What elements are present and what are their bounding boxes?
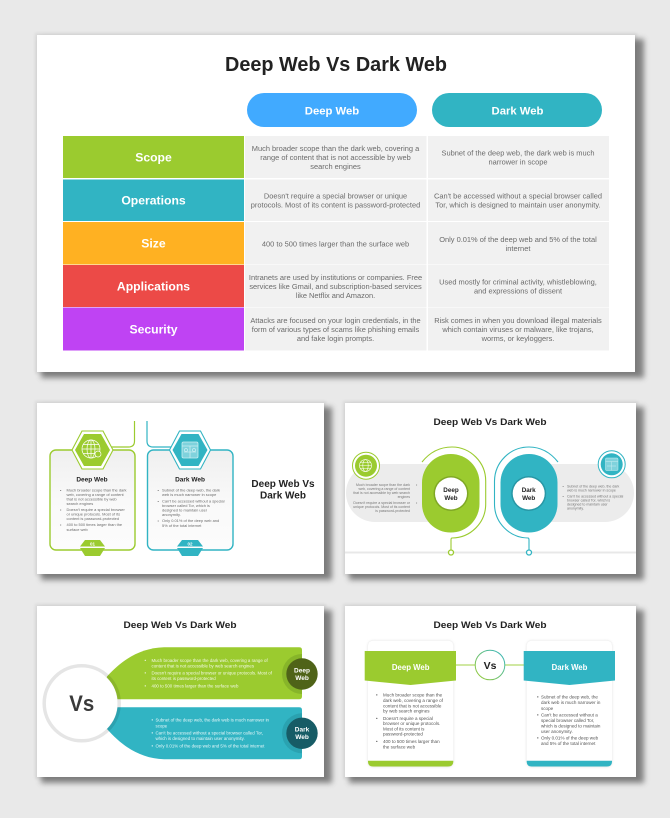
card: Dark Web: Subnet of the deep web, the: [541, 694, 598, 700]
card: Dark Web: Dark Web: [552, 663, 588, 672]
card: Deep Web: Deep Web: [392, 663, 430, 672]
row: Size: internet: [506, 244, 531, 253]
grey panel: Deep Web text: web, covering a range of content: [359, 487, 410, 491]
bullet list: browser called Tor, which is: [162, 503, 210, 508]
row: Size: [63, 222, 609, 264]
card: Deep Web: •: [376, 739, 378, 744]
panel: Vs arrow shapes slide: [35, 604, 332, 783]
row: Operations: protocols. Most of its content is password-protected: [251, 200, 420, 210]
card: Deep Web: •: [376, 716, 378, 721]
Dark Web badge: [282, 713, 322, 753]
Deep Web shape: its content is password-protected: [152, 676, 216, 681]
row: Operations: Doesn't require a special browser or unique: [264, 192, 407, 200]
bullet list: Doesn't require a special browser: [66, 507, 125, 512]
card: Deep Web: Doesn't require a special: [383, 716, 433, 721]
card: Deep Web: by web search engines: [383, 709, 430, 714]
header: Deep Web pill: [247, 93, 417, 127]
Deep Web badge: Web: [295, 675, 309, 682]
row: Size: Only 0.01% of the deep web and 5% of the total: [439, 235, 597, 244]
row: Scope: narrower in scope: [488, 158, 548, 166]
Dark Web badge: Web: [295, 734, 309, 741]
row: Security: which contain viruses or malware, like trojans,: [441, 325, 594, 334]
grey panel: Deep Web text: Doesn't require a special browser or: [353, 501, 411, 505]
grey panel: Dark Web text: anonymity.: [567, 506, 584, 510]
row: Scope: Subnet of the deep web, the dark web is much: [442, 148, 594, 158]
row: Applications: Used mostly for criminal activity, whistleblowing,: [439, 278, 597, 286]
bullet list: web, covering a range of content: [66, 492, 125, 497]
Vs circle: [44, 666, 119, 741]
bullet list: •: [60, 488, 62, 492]
Vs circle: Vs: [484, 660, 497, 672]
card: Dark Web: •: [537, 712, 539, 718]
grey panel: Dark Web text: Can't be accessed without a special: [567, 494, 623, 498]
Dark Web stadium: [494, 447, 558, 555]
Dark Web shape: •: [152, 744, 154, 748]
Deep Web shape: content that is not accessible by web search engines: [152, 664, 255, 668]
Deep Web shape: •: [144, 684, 146, 688]
row: Scope: Scope: [135, 150, 172, 164]
Dark Web shape: Only 0.01% of the deep web and 5% of the total internet: [156, 744, 265, 748]
header: Dark Web pill: Dark Web: [492, 106, 544, 118]
bullet list: surface web: [66, 527, 89, 532]
Dark Web shape: •: [152, 730, 154, 736]
bullet list: Subnet of the deep web, the dark: [162, 488, 220, 492]
row: Security: Risk comes in when you download illegal materials: [434, 316, 602, 325]
bullet list: or unique protocols. Most of its: [66, 512, 120, 516]
icon: dark web badge: [598, 451, 625, 478]
card: Deep Web: Much broader scope than the: [383, 692, 443, 698]
row: Applications: and expressions of dissent: [474, 286, 563, 296]
Dark Web shape: scope: [156, 724, 168, 728]
card: Dark Web: Can't be accessed without a: [541, 712, 598, 718]
Deep Web stadium: [422, 447, 486, 555]
icon: globe: [82, 440, 101, 458]
grey panel: Deep Web text: is password-protected: [375, 509, 410, 513]
number tab 02: 02: [187, 542, 193, 546]
bullet list: that is not accessible by web: [66, 496, 117, 502]
row: Security: form of various types of scams like phishing emails: [252, 325, 419, 334]
bullet list: •: [60, 507, 62, 512]
row: Scope: search engines: [310, 162, 361, 171]
card: Deep Web: content that is not accessible: [383, 703, 442, 708]
header: Deep Web pill: Deep Web: [305, 106, 359, 118]
connector lines: [456, 664, 524, 666]
card: Deep Web: [365, 641, 456, 767]
row: Size: Size: [141, 236, 166, 250]
slide title: Deep Web Vs Dark Web: [434, 620, 547, 631]
grey panel: Deep Web text: •: [416, 483, 418, 487]
Deep Web shape: •: [144, 658, 146, 663]
card heading: Deep Web: [76, 476, 108, 484]
grey panel: Dark Web text: designed to maintain user: [567, 502, 608, 506]
grey panel: Dark Web text: [550, 464, 634, 522]
bullet list: web is much narrower in scope: [162, 492, 217, 497]
row: Applications: services like Gmail, and subscription-based services: [249, 282, 422, 291]
grey panel: Dark Web text: Subnet of the deep web, the dark: [567, 484, 619, 488]
Dark Web shape: [100, 707, 302, 759]
card: Dark Web: [524, 641, 615, 767]
bullet list: •: [158, 518, 160, 523]
grey panel: Deep Web text: Much broader scope than the dark: [356, 483, 410, 487]
Deep Web shape: Much broader scope than the dark web, covering a range of: [152, 658, 268, 663]
Deep Web shape: [100, 647, 302, 699]
Deep Web shape: •: [144, 670, 146, 676]
row: Scope: [63, 136, 609, 178]
bullet list: [158, 488, 225, 528]
Deep Web badge: Deep: [294, 668, 310, 674]
row: Applications: [63, 265, 609, 307]
Dark Web shape: Subnet of the deep web, the dark web is much narrower in: [156, 718, 270, 723]
number tab 01: 01: [90, 542, 95, 546]
bullet list: Only 0.01% of the deep web and: [162, 518, 219, 523]
Dark Web stadium: Web: [522, 495, 535, 502]
grey panel: Deep Web text: unique protocols. Most of its content: [353, 505, 410, 509]
bullet list: content is password-protected: [66, 516, 119, 521]
card: Deep Web: dark web, covering a range of: [383, 698, 444, 703]
Vs circle: Vs: [69, 691, 94, 716]
row: Security: worms, or keyloggers.: [481, 334, 554, 343]
grey panel: Dark Web text: browser called Tor, which is: [567, 498, 610, 502]
Vs circle: [475, 650, 505, 680]
row: Operations: Operations: [121, 194, 186, 208]
bullet list: Can't be accessed without a special: [162, 498, 225, 504]
slide title: Deep Web Vs Dark Web: [434, 417, 547, 428]
row: Size: 400 to 500 times larger than the surface web: [262, 240, 409, 248]
grey panel: Dark Web text: •: [562, 484, 564, 488]
panel: timeline stadium slide: [343, 401, 644, 580]
card: Dark Web: [147, 421, 233, 556]
bullet list: search engines: [66, 501, 93, 506]
grey panel: Deep Web text: engines: [398, 495, 410, 499]
title: Deep Web Vs Dark Web: [225, 53, 447, 76]
card: Deep Web: the surface web: [383, 744, 416, 750]
row: Applications: Intranets are used by institutions or companies. Free: [249, 273, 422, 282]
bullet list: 5% of the total internet: [162, 523, 202, 528]
grey panel: Dark Web text: web is much narrower in scope: [567, 488, 616, 492]
card: Dark Web: which is designed to maintain: [541, 724, 601, 728]
panel: main comparison table slide: [35, 33, 644, 378]
slide title: [251, 479, 315, 502]
slide title: Dark Web: [260, 490, 306, 502]
panel: banner cards slide: [343, 604, 644, 783]
timeline line: [345, 552, 636, 554]
icon: globe badge: [352, 452, 380, 479]
row: Operations: Can't be accessed without a special browser called: [434, 192, 602, 200]
row: Security: [63, 308, 609, 350]
card: Dark Web: •: [537, 736, 539, 740]
Deep Web shape: Doesn't require a special browser or unique protocols. Most of: [152, 670, 273, 676]
bullet list: designed to maintain user: [162, 508, 208, 512]
row: Scope: range of content that is not accessible by web: [260, 153, 411, 162]
row: Scope: Much broader scope than the dark web, covering a: [252, 144, 420, 153]
card: Deep Web: browser or unique protocols.: [383, 721, 440, 726]
card: Deep Web: •: [376, 692, 378, 698]
bullet list: •: [158, 498, 160, 504]
row: Security: Attacks are focused on your login credentials, in the: [250, 316, 421, 325]
icon: dark web browser: [182, 442, 198, 458]
Dark Web shape: which is designed to maintain user anonymity.: [156, 736, 245, 741]
grey panel: Dark Web text: •: [562, 494, 564, 498]
bullet list: [60, 488, 127, 532]
card: Dark Web: special browser called Tor,: [541, 718, 594, 723]
bullet list: •: [60, 522, 62, 527]
Deep Web badge: [282, 654, 322, 694]
card: Dark Web: Only 0.01% of the deep web: [541, 736, 599, 740]
card: Dark Web: •: [537, 694, 539, 700]
row: Operations: [63, 180, 609, 221]
slide title: Deep Web Vs Dark Web: [124, 620, 237, 631]
bullet list: 400 to 500 times larger than the: [66, 522, 123, 527]
slide title: Deep Web Vs: [251, 479, 315, 490]
row: Operations: Tor, which is designed to maintain user anonymity.: [435, 200, 601, 210]
card: Dark Web: user anonymity.: [541, 729, 573, 734]
row: Applications: like Netflix and Amazon.: [296, 291, 375, 300]
card: Deep Web: [50, 421, 135, 556]
panel: hexagon cards slide: [35, 401, 332, 580]
row: Applications: Applications: [117, 280, 190, 294]
Dark Web shape: Can't be accessed without a special browser called Tor,: [156, 730, 263, 736]
card: Dark Web: scope: [541, 706, 554, 711]
header: Dark Web pill: [432, 93, 602, 127]
grey panel: Deep Web text: that is not accessible by web search: [353, 491, 410, 495]
grey panel: Deep Web text: [346, 464, 430, 522]
card: Dark Web: dark web is much narrower in: [541, 700, 601, 705]
Dark Web shape: •: [152, 718, 154, 723]
Deep Web shape: 400 to 500 times larger than the surface web: [152, 684, 239, 688]
bullet list: anonymity.: [162, 512, 181, 517]
row: Security: and fake login prompts.: [297, 334, 374, 343]
card heading: Dark Web: [175, 476, 205, 484]
card: Deep Web: Most of its content is: [383, 726, 425, 731]
Deep Web stadium: Web: [444, 495, 458, 502]
bullet list: Much broader scope than the dark: [66, 488, 127, 492]
grey panel: Deep Web text: •: [416, 501, 418, 505]
card: Deep Web: 400 to 500 times larger than: [383, 739, 440, 744]
row: Security: Security: [129, 322, 178, 336]
bullet list: •: [158, 488, 160, 492]
card: Deep Web: password-protected: [383, 732, 423, 737]
Deep Web stadium: Deep: [443, 487, 459, 494]
Dark Web badge: Dark: [295, 726, 310, 734]
card: Dark Web: and 5% of the total internet: [541, 741, 596, 746]
Dark Web stadium: Dark: [522, 487, 536, 494]
